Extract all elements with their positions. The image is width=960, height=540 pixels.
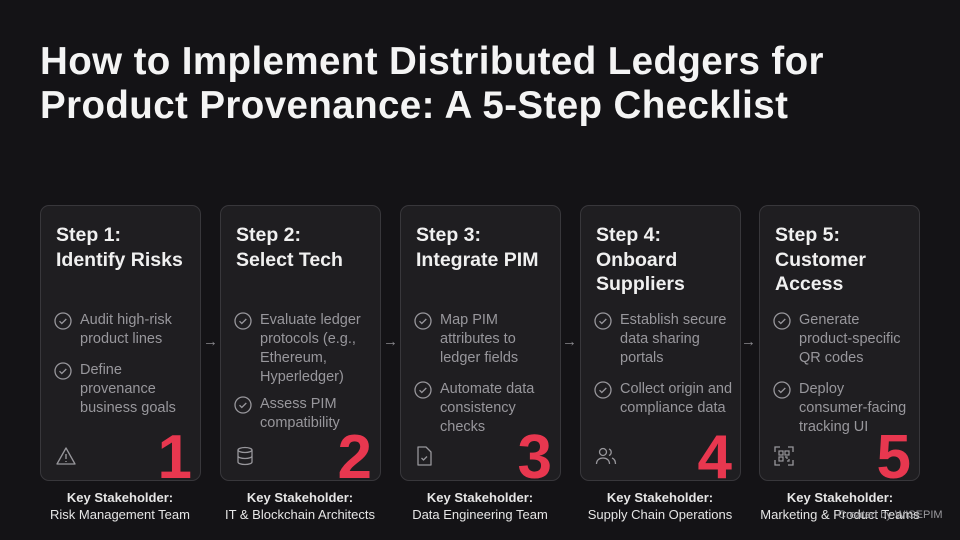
title <box>40 40 824 127</box>
stakeholder 2 <box>225 490 375 522</box>
step 5 heading <box>775 224 866 295</box>
step 2 heading: Step 2: <box>236 224 301 246</box>
stakeholder 5 <box>760 490 920 522</box>
step 5 bullets: Deploy consumer-facing tracking UI <box>799 381 906 435</box>
stakeholder 2: IT & Blockchain Architects <box>225 507 375 522</box>
step 4 bullets <box>594 312 732 416</box>
stakeholder 5: Marketing & Product Teams <box>760 507 920 522</box>
panel: step 1 <box>40 205 201 481</box>
icon: document check <box>417 446 432 466</box>
step 4 heading <box>596 224 685 295</box>
step 2 bullets: Evaluate ledger protocols (e.g., Ethereum, Hyperledger) <box>260 312 361 385</box>
step 3 heading: Integrate PIM <box>416 248 538 270</box>
step 2 heading: Select Tech <box>236 248 343 270</box>
icon: warning <box>56 447 76 465</box>
step 4 heading: Step 4: <box>596 224 661 246</box>
step 4 heading: Suppliers <box>596 273 685 295</box>
title: How to Implement Distributed Ledgers for <box>40 40 824 83</box>
arrow: → <box>203 333 218 350</box>
stakeholder 1: Risk Management Team <box>50 507 190 522</box>
arrow: → <box>383 333 398 350</box>
stakeholder 4: Key Stakeholder: <box>607 490 713 505</box>
step 5 bullets <box>773 312 906 435</box>
stakeholder 4: Supply Chain Operations <box>588 507 732 522</box>
stakeholder 4 <box>588 490 732 522</box>
step 3 bullets: Automate data consistency checks <box>440 381 534 435</box>
panel: step 2 <box>220 205 381 481</box>
stakeholder 3 <box>412 490 548 522</box>
step 2 bullets: Assess PIM compatibility <box>260 396 340 431</box>
title: Product Provenance: A 5-Step Checklist <box>40 84 788 127</box>
stakeholder 1: Key Stakeholder: <box>67 490 173 505</box>
step 1 heading: Step 1: <box>56 224 121 246</box>
stakeholder 2: Key Stakeholder: <box>247 490 353 505</box>
step 5 bullets: Generate product-specific QR codes <box>799 312 901 366</box>
icon: users <box>596 448 616 464</box>
step 2 bullets <box>234 312 361 431</box>
step 3 bullets: Map PIM attributes to ledger fields <box>440 312 518 366</box>
step 3 bullets <box>414 312 534 435</box>
step 3 heading: Step 3: <box>416 224 481 246</box>
stakeholder 3: Key Stakeholder: <box>427 490 533 505</box>
step 1 heading: Identify Risks <box>56 248 183 270</box>
step 5 heading: Access <box>775 273 843 295</box>
panel: step 4 <box>580 205 741 481</box>
arrow: → <box>562 333 577 350</box>
stakeholder 1 <box>50 490 190 522</box>
step 4 heading: Onboard <box>596 248 677 270</box>
panel: step 5 <box>759 205 920 481</box>
step 4 bullets: Collect origin and compliance data <box>620 381 732 416</box>
step 4 bullets: Establish secure data sharing portals <box>620 312 726 366</box>
arrow: → <box>741 333 756 350</box>
stakeholder 5: Key Stakeholder: <box>787 490 893 505</box>
step 1 bullets <box>54 312 176 416</box>
step 1 bullets: Define provenance business goals <box>80 362 176 416</box>
step 3 heading <box>416 224 538 270</box>
step 5 heading: Step 5: <box>775 224 840 246</box>
stakeholder 3: Data Engineering Team <box>412 507 548 522</box>
credit: Created by WISEPIM <box>838 509 943 521</box>
step 1 heading <box>56 224 183 270</box>
icon: database <box>237 446 253 466</box>
panel: step 3 <box>400 205 561 481</box>
step 5 heading: Customer <box>775 248 866 270</box>
icon: qr scan <box>774 446 794 466</box>
step 1 bullets: Audit high-risk product lines <box>80 312 172 347</box>
step 2 heading <box>236 224 343 270</box>
